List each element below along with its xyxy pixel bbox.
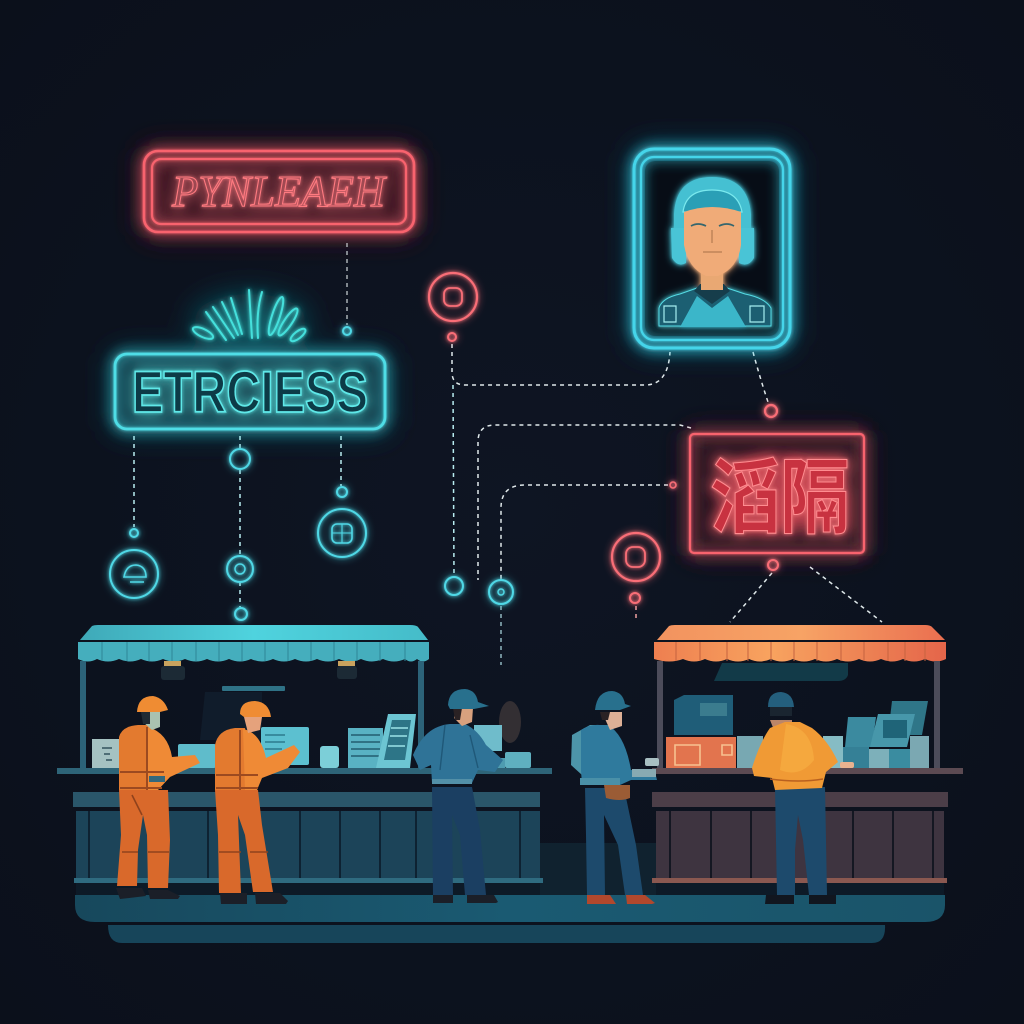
neon sign: red title: [144, 151, 414, 232]
dashed connector lines: [134, 243, 882, 665]
left stall counter items: [92, 701, 531, 768]
left stall counter: [57, 768, 552, 895]
right stall counter: [652, 768, 963, 895]
neon sign: cyan label: [115, 354, 385, 429]
worker 5: orange jacket: [752, 692, 854, 904]
worker 2: orange: [215, 701, 300, 904]
right stall counter items: [666, 695, 929, 768]
portrait figure: [659, 177, 771, 327]
neon portrait frame: [634, 149, 790, 348]
neon halos: [110, 144, 868, 556]
cyan sign lettering: ETRCIESS: [132, 360, 368, 425]
right stall: [652, 625, 963, 895]
left stall awning: [78, 625, 429, 662]
right stall posts and shade: [657, 661, 940, 769]
red glyphs: 滔隔: [710, 453, 850, 544]
left stall: [57, 625, 552, 895]
neon sign: red glyph panel: [690, 434, 864, 553]
red sign lettering: PYNLEAEH: [171, 167, 387, 216]
right stall awning: [654, 625, 946, 662]
neon nodes: cyan: [110, 327, 513, 620]
worker 4: blue with backpack: [571, 691, 659, 904]
neon fan ornament: [191, 290, 307, 343]
neon nodes: red: [429, 273, 778, 603]
floor platform: [75, 843, 945, 943]
worker 1: orange: [116, 696, 200, 899]
worker 3: blue: [413, 689, 503, 903]
left stall posts and lamps: [80, 661, 424, 769]
